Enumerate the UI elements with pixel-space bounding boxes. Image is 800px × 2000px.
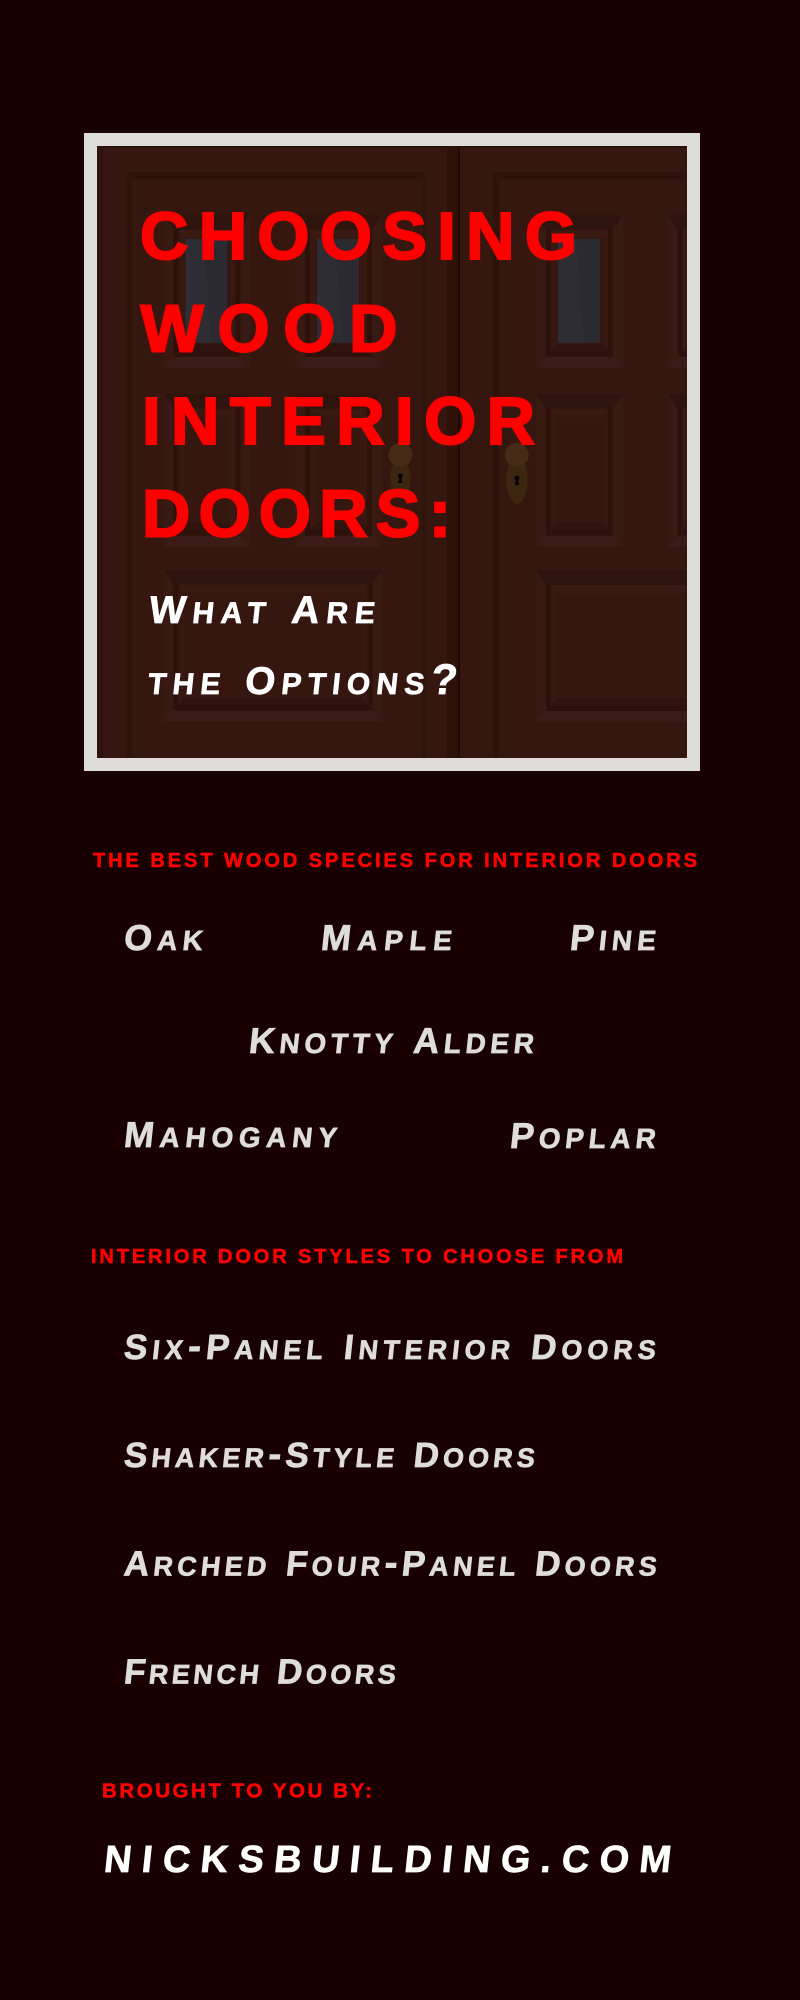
list: wood species: Poplar [508, 1113, 659, 1157]
subtitle [146, 585, 460, 704]
heading: wood species: THE BEST WOOD SPECIES FOR INTERIOR DOORS [93, 850, 697, 872]
list: wood species: Mahogany [122, 1112, 340, 1156]
panel: hero frame with door illustration [84, 133, 755, 771]
list: door styles: Six-Panel Interior Doors [122, 1325, 659, 1368]
subtitle: What Are [147, 585, 378, 633]
list: door styles: French Doors [122, 1650, 399, 1692]
list: wood species: Oak [122, 915, 206, 959]
left door bottom panel [163, 570, 382, 722]
title: INTERIOR [142, 384, 535, 459]
list: wood species: Knotty Alder [247, 1018, 537, 1062]
frame border [84, 133, 700, 771]
title: CHOOSING [140, 199, 577, 274]
list: wood species: Pine [568, 915, 659, 959]
list: wood species: Maple [319, 915, 455, 959]
title: DOORS: [142, 477, 451, 552]
list: door styles: Arched Four-Panel Doors [122, 1542, 660, 1584]
list: door styles: Shaker-Style Doors [122, 1433, 538, 1476]
credit heading: BROUGHT TO YOU BY: [102, 1780, 372, 1802]
heading: door styles: INTERIOR DOOR STYLES TO CHOOSE FROM [91, 1246, 623, 1268]
door illustration [97, 146, 687, 758]
title [140, 199, 577, 552]
left door knob [388, 443, 412, 490]
title: WOOD [140, 292, 398, 366]
right door knob [505, 443, 529, 504]
subtitle: the Options? [146, 656, 460, 704]
credit website: NICKSBUILDING.COM [102, 1839, 673, 1881]
list: door styles [122, 1325, 660, 1692]
list: wood species [122, 915, 659, 1157]
right door bottom panel [536, 570, 755, 722]
